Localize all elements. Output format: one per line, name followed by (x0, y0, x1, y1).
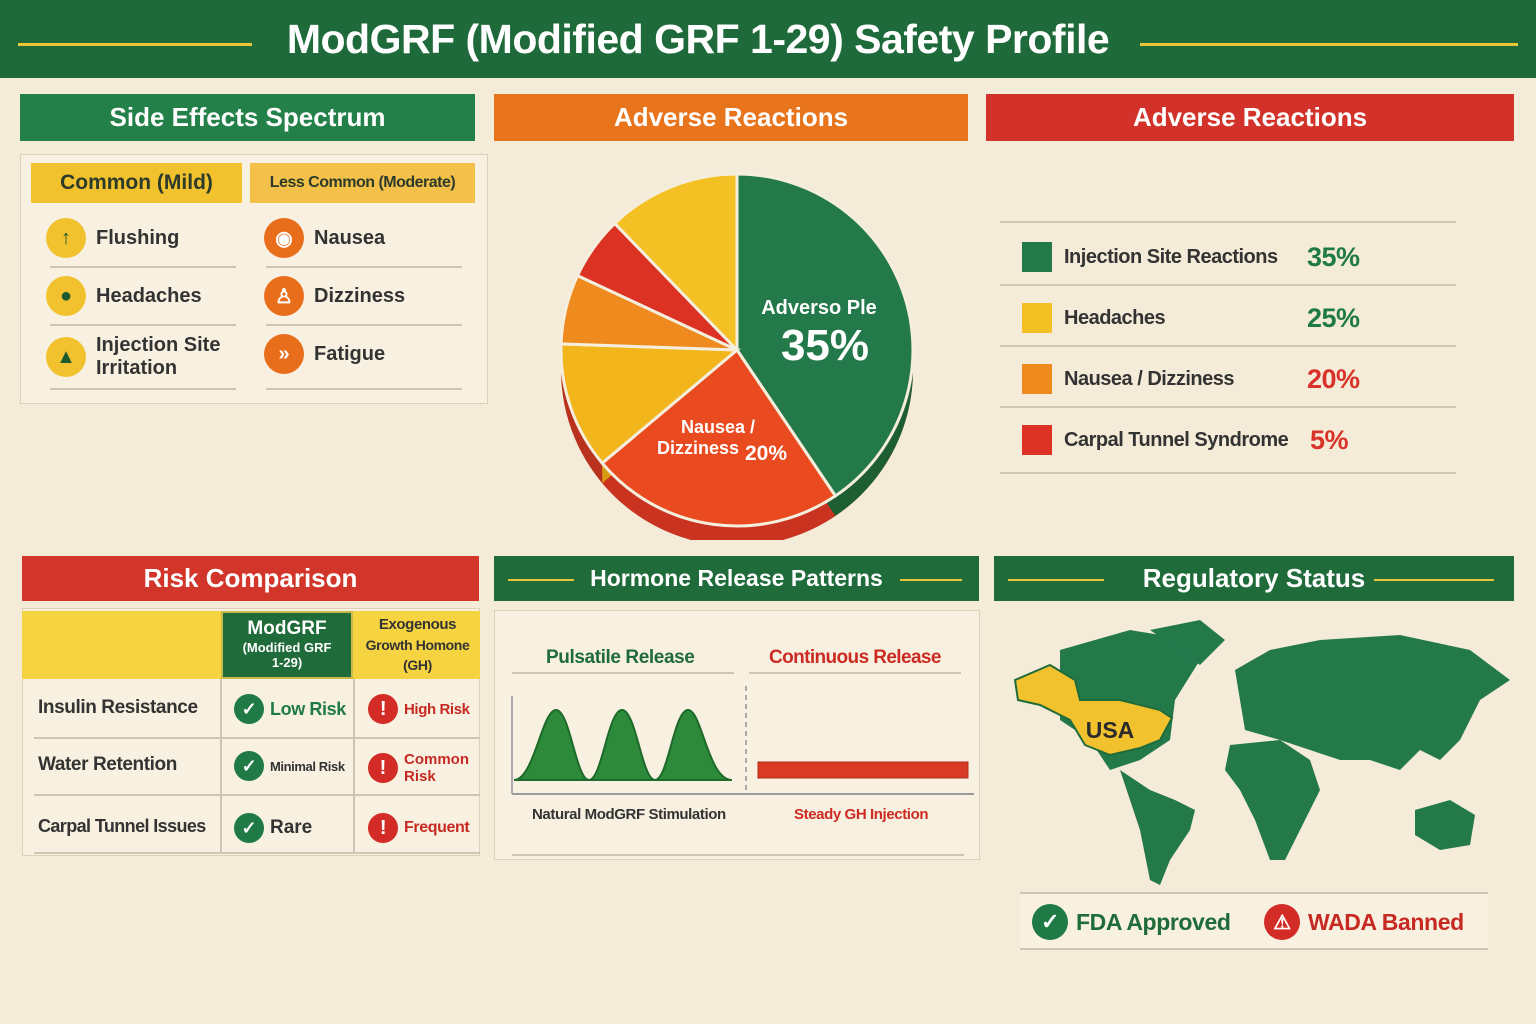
legend: carpal tunnel: Carpal Tunnel Syndrome (1064, 428, 1288, 450)
title banner (0, 0, 1536, 78)
item: nausea: Nausea (314, 226, 385, 248)
item: fatigue: Fatigue (314, 342, 385, 364)
column header: modgrf: 1-29) (272, 655, 302, 670)
column header: exogenous gh (366, 616, 470, 673)
pie chart (561, 176, 913, 540)
item: injection site: Injection Site (96, 334, 220, 356)
column header: exogenous gh: Growth Homone (366, 637, 469, 653)
panel: adverse reactions legend: 20% (1307, 364, 1360, 394)
legend: carpal tunnel (1022, 424, 1348, 455)
caption: steady gh: Steady GH Injection (794, 806, 928, 823)
panel: risk comparison: High Risk (404, 700, 470, 718)
pie chart: 20% (745, 442, 787, 465)
world map: USA (1086, 717, 1134, 743)
badge: fda approved: FDA Approved (1076, 908, 1230, 934)
panel: risk comparison: ✓ (242, 756, 256, 776)
item: headaches: ● (60, 284, 72, 306)
badge: wada banned: ⚠ (1273, 912, 1291, 934)
panel: regulatory status (994, 556, 1514, 950)
item: nausea: ◉ (275, 228, 293, 250)
pie chart: Adverso Ple (761, 297, 877, 319)
chart: pulses and steady line (511, 686, 974, 795)
item: flushing: Flushing (96, 226, 179, 248)
pie chart: Nausea / (681, 417, 755, 437)
heading: adverse reactions (494, 94, 968, 141)
row: water retention: Water Retention (38, 754, 177, 775)
badge: wada banned (1264, 904, 1464, 940)
panel: hormone release patterns (494, 556, 980, 860)
column header: exogenous gh: Exogenous (379, 616, 456, 633)
panel: risk comparison: Rare (270, 817, 312, 838)
item: flushing: ↑ (61, 226, 71, 248)
pie chart: 35% (781, 321, 869, 370)
column header: less common (250, 163, 475, 203)
heading: side effects: Side Effects Spectrum (110, 102, 385, 132)
badge: fda approved: ✓ (1041, 909, 1059, 934)
item: headaches (46, 276, 202, 316)
panel: side effects spectrum (20, 94, 488, 404)
legend: headaches (1022, 302, 1360, 333)
panel: risk comparison: ! (380, 698, 386, 720)
heading: risk comparison: Risk Comparison (144, 563, 357, 593)
title text: ModGRF (Modified GRF 1-29) Safety Profile (287, 16, 1109, 62)
item: nausea (264, 218, 386, 258)
row: carpal tunnel: Carpal Tunnel Issues (38, 816, 206, 836)
panel: risk comparison: ! (380, 756, 386, 778)
item: injection site (46, 334, 220, 379)
badge: wada banned: WADA Banned (1308, 908, 1464, 934)
panel: risk comparison: Minimal Risk (270, 758, 345, 774)
column header: modgrf: ModGRF (247, 618, 327, 639)
panel: risk comparison (22, 556, 480, 856)
column header: exogenous gh: (GH) (403, 657, 432, 673)
panel: risk comparison: Risk (404, 768, 436, 785)
heading: adverse reactions red: Adverse Reactions (1133, 102, 1367, 132)
heading: side effects (20, 94, 475, 141)
item: dizziness: ♙ (275, 286, 293, 308)
caption: natural stimulation: Natural ModGRF Stimulation (532, 806, 726, 823)
column header: less common: Less Common (Moderate) (270, 174, 455, 191)
legend: headaches: Headaches (1064, 306, 1165, 328)
column header: modgrf (221, 611, 353, 679)
item: dizziness (264, 276, 405, 316)
heading: adverse reactions: Adverse Reactions (614, 102, 848, 132)
panel: risk comparison: ✓ (242, 698, 256, 718)
heading: hormone release (494, 556, 979, 601)
column header: common (31, 163, 242, 203)
panel: risk comparison: Frequent (404, 819, 469, 836)
world map (1014, 620, 1510, 885)
column header: common: Common (Mild) (60, 171, 213, 194)
legend: nausea: Nausea / Dizziness (1064, 368, 1234, 390)
item: dizziness: Dizziness (314, 284, 405, 306)
column header: modgrf: (Modified GRF (243, 640, 331, 655)
heading: regulatory status: Regulatory Status (1143, 563, 1365, 593)
item: injection site: Irritation (96, 357, 177, 379)
panel: adverse reactions legend: 25% (1307, 302, 1360, 332)
pie chart: Dizziness (657, 438, 739, 458)
label: pulsatile: Pulsatile Release (546, 647, 694, 668)
panel: risk comparison: Low Risk (270, 698, 346, 718)
row: insulin resistance: Insulin Resistance (38, 697, 198, 718)
panel: risk comparison: Common (404, 751, 469, 768)
panel: adverse reactions legend: 35% (1307, 242, 1360, 272)
legend: injection site: Injection Site Reactions (1064, 246, 1278, 268)
badge: fda approved (1032, 904, 1230, 940)
item: flushing (46, 218, 179, 258)
heading: risk comparison (22, 556, 479, 601)
item: headaches: Headaches (96, 284, 202, 306)
panel: adverse reactions legend: 5% (1310, 424, 1348, 454)
item: injection site: ▲ (56, 346, 76, 368)
badge box (1020, 892, 1488, 950)
panel: adverse reactions legend (986, 94, 1514, 474)
item: fatigue: » (278, 342, 290, 364)
item: fatigue (264, 334, 385, 374)
heading: adverse reactions red (986, 94, 1514, 141)
legend: nausea (1022, 364, 1360, 394)
panel: risk comparison: ! (380, 816, 386, 838)
heading: regulatory status (994, 556, 1514, 601)
panel: risk comparison: ✓ (241, 818, 257, 838)
heading: hormone release: Hormone Release Patterns (590, 565, 883, 591)
label: continuous: Continuous Release (769, 647, 941, 668)
legend: injection site (1022, 242, 1360, 272)
